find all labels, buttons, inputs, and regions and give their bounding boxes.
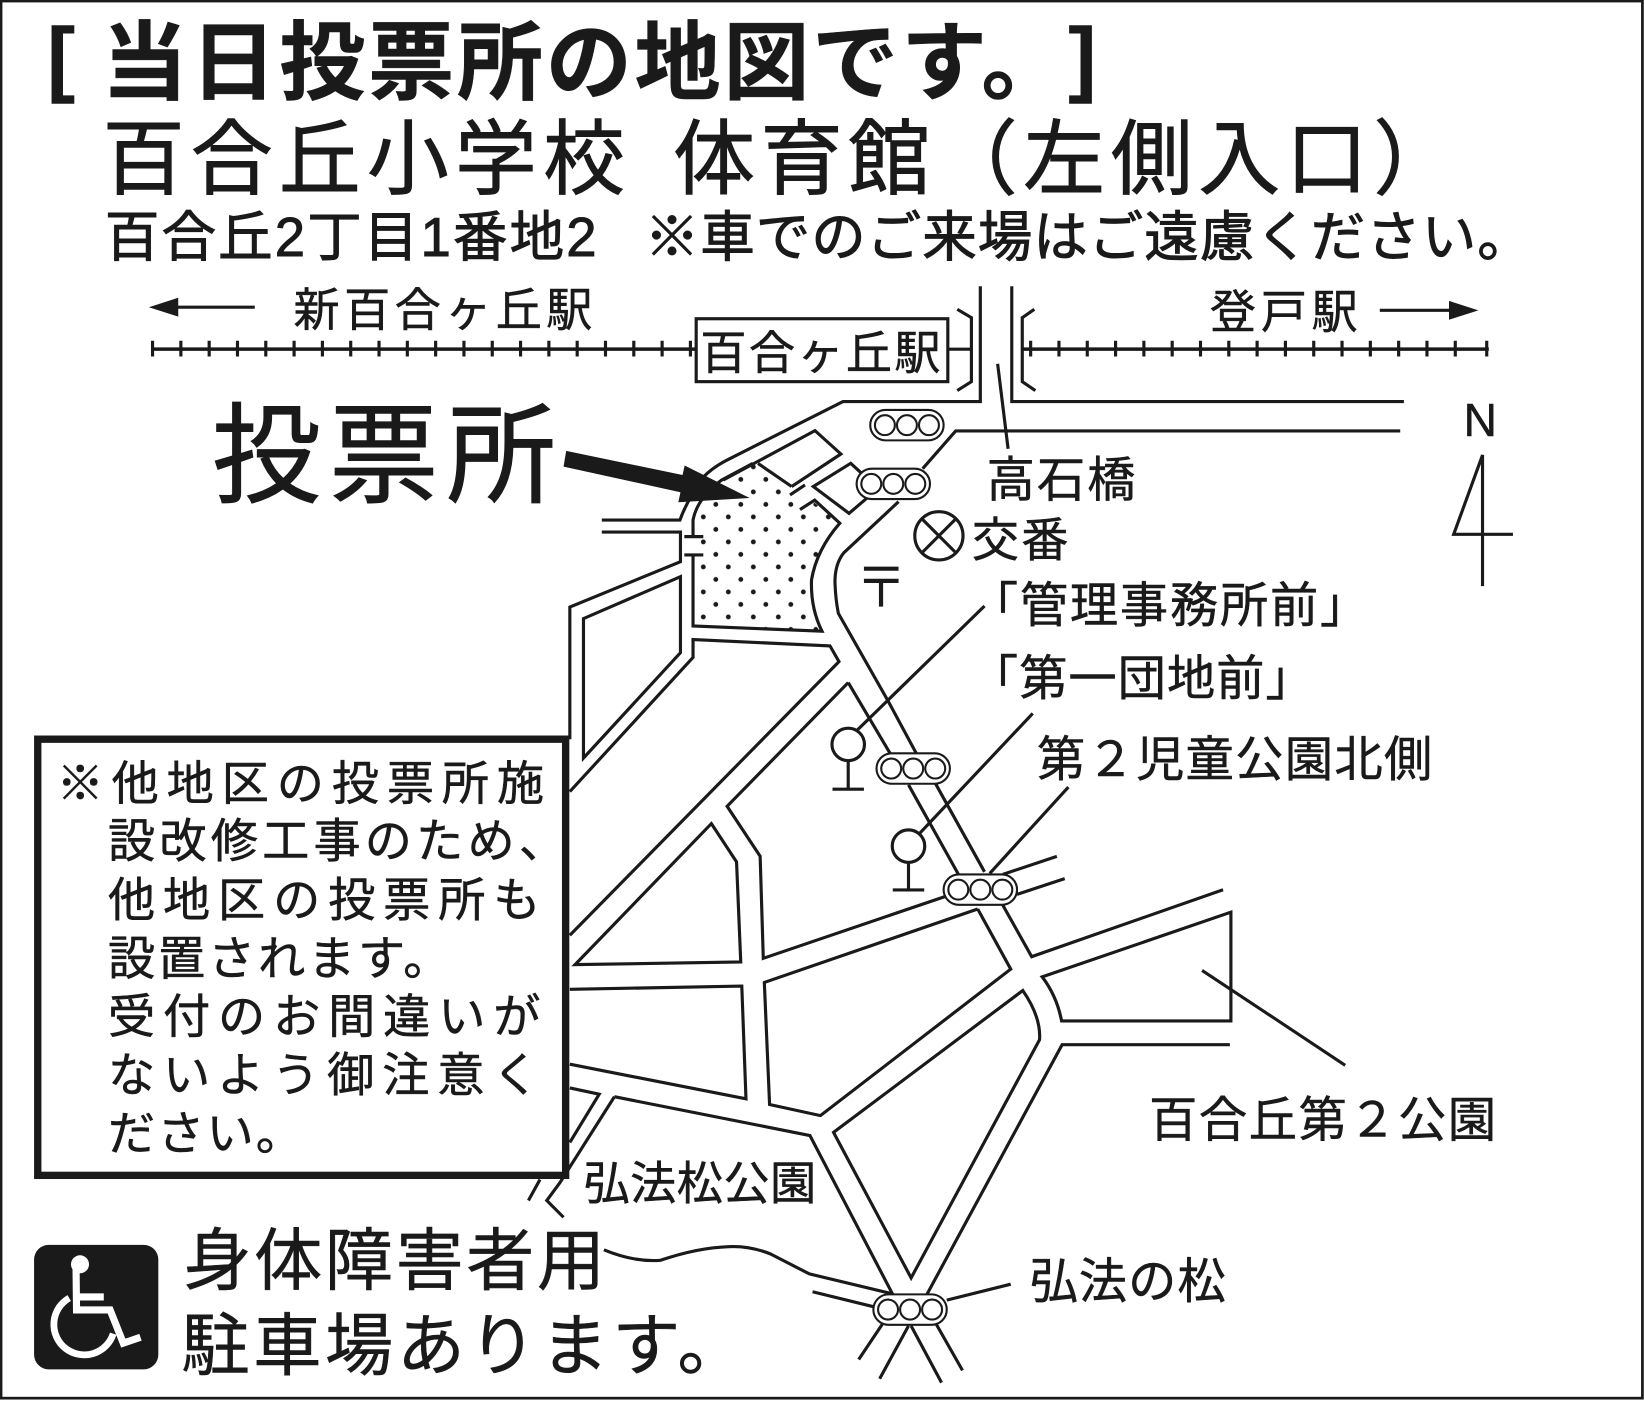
- park block: [1042, 912, 1231, 1021]
- gate: [684, 537, 703, 555]
- label park north: [990, 733, 1432, 873]
- east roads: [1012, 286, 1404, 402]
- title: 当日投票所の地図です。: [102, 15, 1067, 111]
- north arrow: [1454, 394, 1513, 586]
- title: [: [47, 10, 75, 104]
- parking notice: ※車でのご来場はご遠慮ください。: [645, 207, 1532, 268]
- north arrow: N: [1464, 394, 1497, 446]
- traffic light 3: [877, 753, 950, 784]
- railway east: [1022, 341, 1489, 356]
- south-west blocks: [570, 986, 746, 1099]
- label Koubou-matsu park: 弘法松公園: [583, 1157, 816, 1209]
- label Takaishi bridge: [987, 364, 1135, 507]
- venue name: 体育館（左側入口）: [673, 115, 1455, 206]
- bus stop danchi: [892, 652, 1314, 890]
- north-west road: [602, 286, 980, 520]
- traffic light 2: [857, 469, 930, 499]
- polling place label: 投票所: [212, 396, 556, 518]
- label Shin-Yurigaoka station: 新百合ヶ丘駅: [294, 284, 592, 336]
- polling site outline: [693, 463, 840, 631]
- accessible parking text: 身体障害者用: [183, 1223, 605, 1299]
- note box: ないよう御注意く: [108, 1048, 547, 1101]
- bus stop danchi: 「第一団地前」: [970, 652, 1314, 706]
- buildings: [723, 431, 841, 487]
- note box: 設改修工事のため、: [108, 815, 570, 868]
- note box: [38, 739, 570, 1175]
- label Yurigaoka park: 百合丘第２公園: [1149, 1094, 1496, 1148]
- mid blocks: [575, 824, 741, 965]
- note box: ださい。: [108, 1107, 305, 1160]
- label Koubou pine: 弘法の松: [1030, 1255, 1226, 1309]
- label Takaishi bridge: 高石橋: [987, 453, 1135, 507]
- railway west: [152, 341, 696, 356]
- wheelchair icon: [34, 1245, 158, 1369]
- police box: [915, 512, 1068, 567]
- traffic light 1: [870, 410, 944, 440]
- station box: 百合ヶ丘駅: [700, 327, 940, 379]
- traffic light 4: [944, 874, 1017, 905]
- bus stop office: 「管理事務所前」: [970, 579, 1368, 633]
- label park north: 第２児童公園北側: [1037, 733, 1432, 787]
- big arrow: [564, 451, 750, 502]
- traffic light 5: [873, 1294, 947, 1325]
- note box: 他地区の投票所も: [108, 873, 548, 926]
- note box: ※他地区の投票所施: [57, 757, 552, 810]
- police box: 交番: [972, 514, 1068, 567]
- venue name: 百合丘小学校: [103, 115, 625, 206]
- arrow to Noborito: [1380, 301, 1478, 320]
- bottom road: [604, 1247, 892, 1294]
- label Yurigaoka park: [1149, 970, 1496, 1148]
- note box: 受付のお間違いが: [108, 990, 548, 1043]
- accessible parking text: [181, 1223, 745, 1384]
- venue name: [103, 115, 1455, 206]
- accessible parking text: 駐車場あります。: [181, 1308, 745, 1384]
- note box: 設置されます。: [108, 932, 453, 985]
- label Noborito station: 登戸駅: [1210, 286, 1358, 338]
- bridge brackets: [948, 309, 1035, 391]
- post office: [864, 569, 899, 607]
- arrow to Shin-Yurigaoka: [149, 298, 255, 317]
- address: 百合丘2丁目1番地2: [105, 207, 597, 268]
- road map: [528, 286, 1404, 1383]
- title: ]: [1068, 10, 1096, 104]
- bus stop office: [832, 579, 1368, 789]
- polling site dotted area: [693, 463, 840, 631]
